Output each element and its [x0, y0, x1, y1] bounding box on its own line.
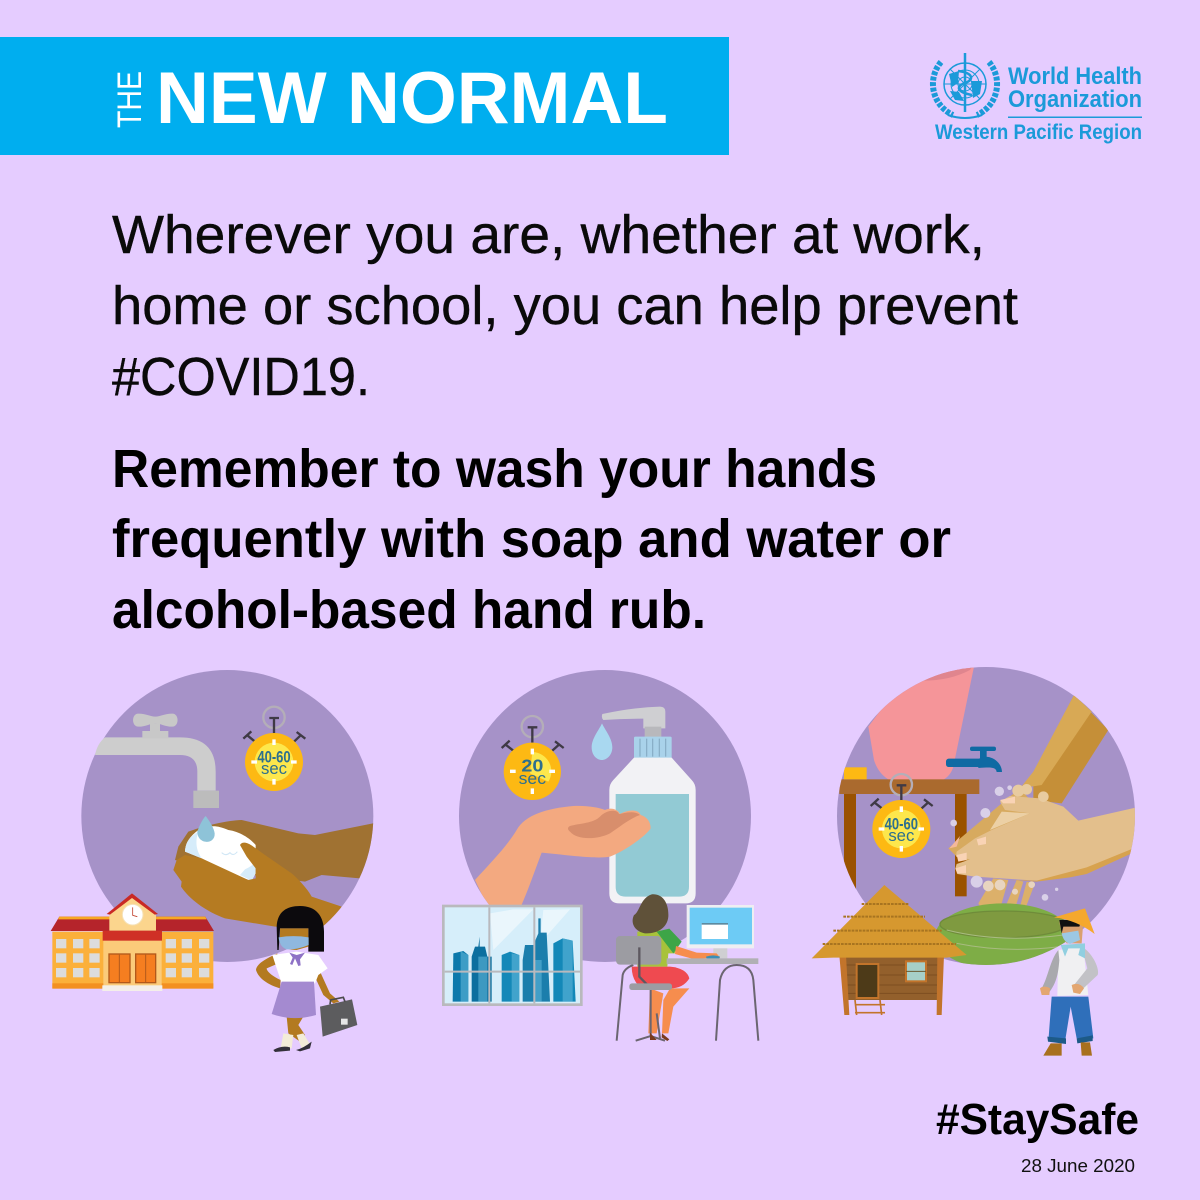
intro text block: [112, 205, 1018, 407]
green basin: [936, 903, 1066, 965]
bold message text block: [112, 439, 951, 640]
icon: timer 20 sec: sec: [519, 769, 546, 788]
icon: timer 40-60 sec: 40-60: [257, 748, 291, 767]
icon: timer 40-60 sec: [871, 774, 933, 858]
icon: tap: [95, 714, 219, 808]
washing hands: [948, 695, 1137, 916]
hands with soap: [173, 816, 377, 927]
icon: timer 40-60 sec: sec: [888, 826, 914, 845]
open hand: [475, 806, 651, 908]
WHO logo: [933, 53, 1142, 144]
figure: schoolgirl with mask and bag: [256, 906, 357, 1052]
icon: WHO emblem: [933, 53, 997, 118]
panel: office hand rub: [443, 670, 758, 1041]
figure: farmer with hat and mask: [1040, 908, 1098, 1056]
intro text block: Wherever you are, whether at work,: [112, 205, 985, 265]
table with supports: [839, 767, 979, 901]
icon: stilt hut: [812, 885, 967, 1015]
icon: timer 20 sec: 20: [521, 756, 543, 776]
water tank: [868, 667, 974, 786]
banner title: NEW NORMAL: NEW NORMAL: [156, 58, 668, 139]
icon: hand rub dispenser: [592, 707, 696, 903]
panel: school handwashing: [51, 670, 377, 1052]
soap bubbles: [950, 784, 1058, 901]
intro text block: #COVID19.: [112, 347, 370, 407]
bold message text block: frequently with soap and water or: [112, 509, 951, 569]
icon: timer 40-60 sec: sec: [261, 759, 287, 778]
icon: timer 40-60 sec: 40-60: [885, 814, 918, 833]
figure: office worker at desk: [616, 894, 758, 1041]
icon: office window with skyline: [443, 906, 581, 1005]
icon: school building: [51, 893, 214, 991]
logo text: Western Pacific Region: Western Pacific Region: [935, 121, 1142, 144]
intro text block: home or school, you can help prevent: [112, 276, 1018, 336]
bold message text block: Remember to wash your hands: [112, 439, 877, 499]
date: 28 June 2020: [1021, 1155, 1135, 1176]
icon: timer 20 sec: [502, 716, 564, 800]
icon: blue tap: [946, 747, 1002, 772]
panel: rural handwashing: [812, 663, 1137, 1056]
header banner: [0, 37, 729, 155]
#StaySafe hashtag: #StaySafe: [936, 1095, 1139, 1144]
banner kicker: THE: THE: [111, 71, 149, 128]
logo text: Organization: Organization: [1008, 86, 1142, 113]
bold message text block: alcohol-based hand rub.: [112, 580, 706, 640]
logo text: World Health: World Health: [1008, 63, 1142, 90]
icon: timer 40-60 sec: [243, 707, 305, 791]
